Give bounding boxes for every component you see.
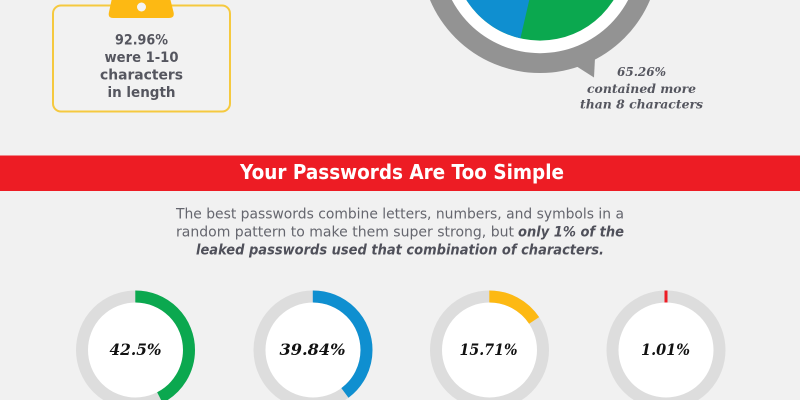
donut: 1.01%: 1.01% [641, 340, 690, 359]
donut: 15.71%: 15.71% [460, 340, 518, 359]
intro paragraph: random pattern to make them super strong, but [176, 224, 514, 240]
intro paragraph [175, 206, 624, 258]
pie caption: 65.26% [617, 65, 666, 79]
callout text [100, 32, 183, 101]
callout text: in length [108, 85, 176, 101]
bubble tail [576, 58, 595, 78]
section heading band [0, 156, 800, 191]
callout border [53, 6, 230, 112]
donut: 1.01% [612, 290, 720, 400]
callout text: characters [100, 68, 183, 84]
bubble white ring [440, 0, 640, 53]
intro paragraph: leaked passwords used that combination of characters. [196, 242, 604, 258]
icon: yellow tag [109, 0, 174, 18]
heading: Your Passwords Are Too Simple [239, 160, 564, 184]
pie chart speech bubble [421, 0, 659, 78]
bubble gray ring [421, 0, 659, 73]
pie: blue slice [453, 0, 540, 38]
intro paragraph: only 1% of the [518, 224, 624, 240]
red band [0, 156, 800, 191]
donut: 42.5% [82, 296, 189, 400]
donut: 39.84%: 39.84% [280, 340, 346, 359]
pie: green slice [453, 0, 627, 41]
callout text: 92.96% [115, 32, 168, 48]
donut: 42.5%: 42.5% [110, 340, 162, 359]
callout text: were 1-10 [104, 50, 178, 66]
callout: 92.96% length [53, 0, 230, 112]
pie caption: than 8 characters [580, 98, 703, 112]
donut: 15.71% [436, 296, 543, 400]
pie caption [580, 65, 703, 112]
intro paragraph: The best passwords combine letters, numbers, and symbols in a [175, 206, 624, 222]
donut: 39.84% [260, 296, 366, 400]
pie caption: contained more [587, 82, 696, 96]
